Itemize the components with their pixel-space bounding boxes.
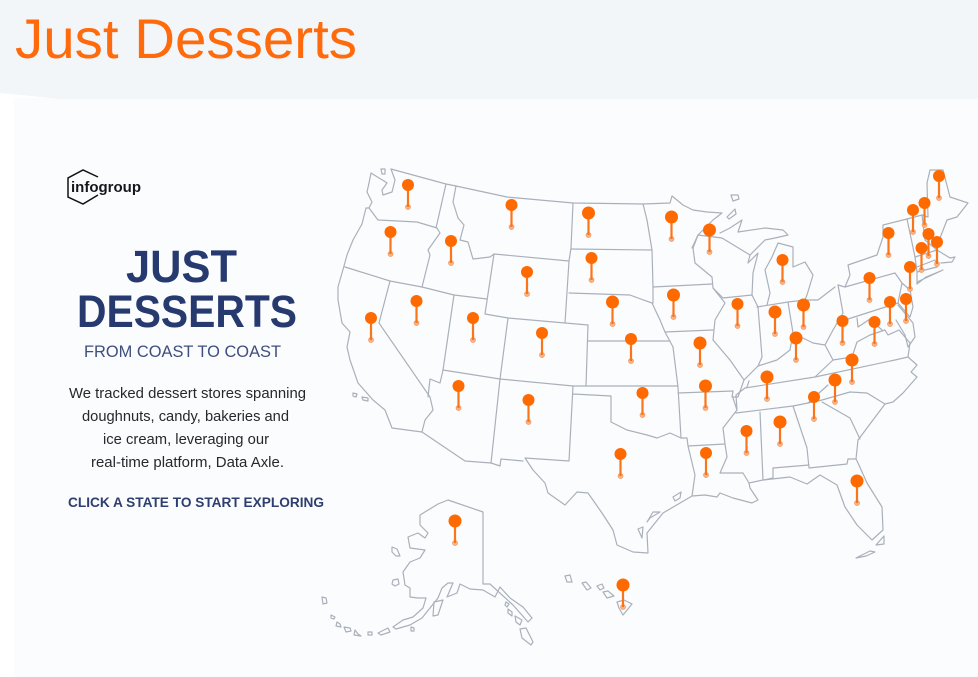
pin: WV [836,315,848,346]
pin: ND [582,206,595,238]
pin: UT [467,312,479,342]
pin: DE [900,293,912,324]
pin: FL [850,474,864,506]
pin: WY [521,266,533,296]
map of US states [338,169,968,558]
pin: NV [410,295,422,326]
pin: TX [614,448,626,478]
pin: IN [768,306,782,336]
description text [69,386,306,471]
pin: AR [699,380,712,410]
description text: We tracked dessert stores spanning [69,386,306,402]
infographic heading: DESSERTS [77,286,297,337]
infogroup logo: infogroup [71,180,141,196]
state pins [365,170,945,610]
pin: HI [616,578,630,610]
subheading: FROM COAST TO COAST [84,343,281,361]
pin: LA [700,447,712,478]
page title: Just Desserts [15,7,357,70]
pin: SD [586,252,598,282]
pin: AL [774,416,786,446]
pin: GA [808,391,820,422]
pin: PA [864,272,876,302]
south east [736,357,917,413]
pin: VA [868,316,880,346]
pin: KY [790,332,802,362]
pin: ME [933,170,945,200]
pin: WI [703,224,716,254]
pin: MA [922,228,934,258]
northern border and Pacific Northwest [391,169,744,397]
pin: CA [365,312,377,342]
pin: MN [665,210,678,242]
southern plains and Texas [525,386,695,553]
call to action: CLICK A STATE TO START EXPLORING [68,495,324,510]
infographic heading [77,241,297,337]
pin: NC [846,354,858,384]
pin: ID [445,235,457,266]
map of Hawaii [565,575,632,615]
pin: NH [918,197,930,228]
small islands [731,195,739,201]
infographic heading: JUST [126,241,237,292]
pin: TN [760,370,774,402]
pin: CT [916,242,928,272]
midwest and great lakes [713,288,762,380]
pin: CO [536,327,548,358]
pin: MT [506,199,518,230]
pin: NY [882,227,894,258]
pin: IA [667,288,680,320]
pin: AK [448,514,462,546]
pin: VT [907,204,919,234]
mid Atlantic and New England [838,273,902,303]
pin: NE [606,296,619,326]
pin: NJ [904,261,916,292]
pin: MO [694,336,706,368]
header band [0,0,978,99]
pin: MS [740,425,752,456]
pin: MI [776,254,788,284]
pin: RI [931,236,943,266]
description text: real-time platform, Data Axle. [91,455,284,471]
pin: OK [636,387,648,418]
pin: KS [625,333,637,364]
pin: OH [797,298,810,330]
pin: AZ [452,380,464,410]
pin: WA [402,179,414,210]
pin: NM [522,394,534,424]
description text: doughnuts, candy, bakeries and [82,409,289,425]
pin: MD [884,296,896,326]
map of Alaska [322,500,533,645]
description text: ice cream, leveraging our [103,432,269,448]
pin: IL [732,298,744,328]
pin: SC [828,374,842,404]
pin: OR [384,226,396,256]
infogroup logo [68,170,141,204]
